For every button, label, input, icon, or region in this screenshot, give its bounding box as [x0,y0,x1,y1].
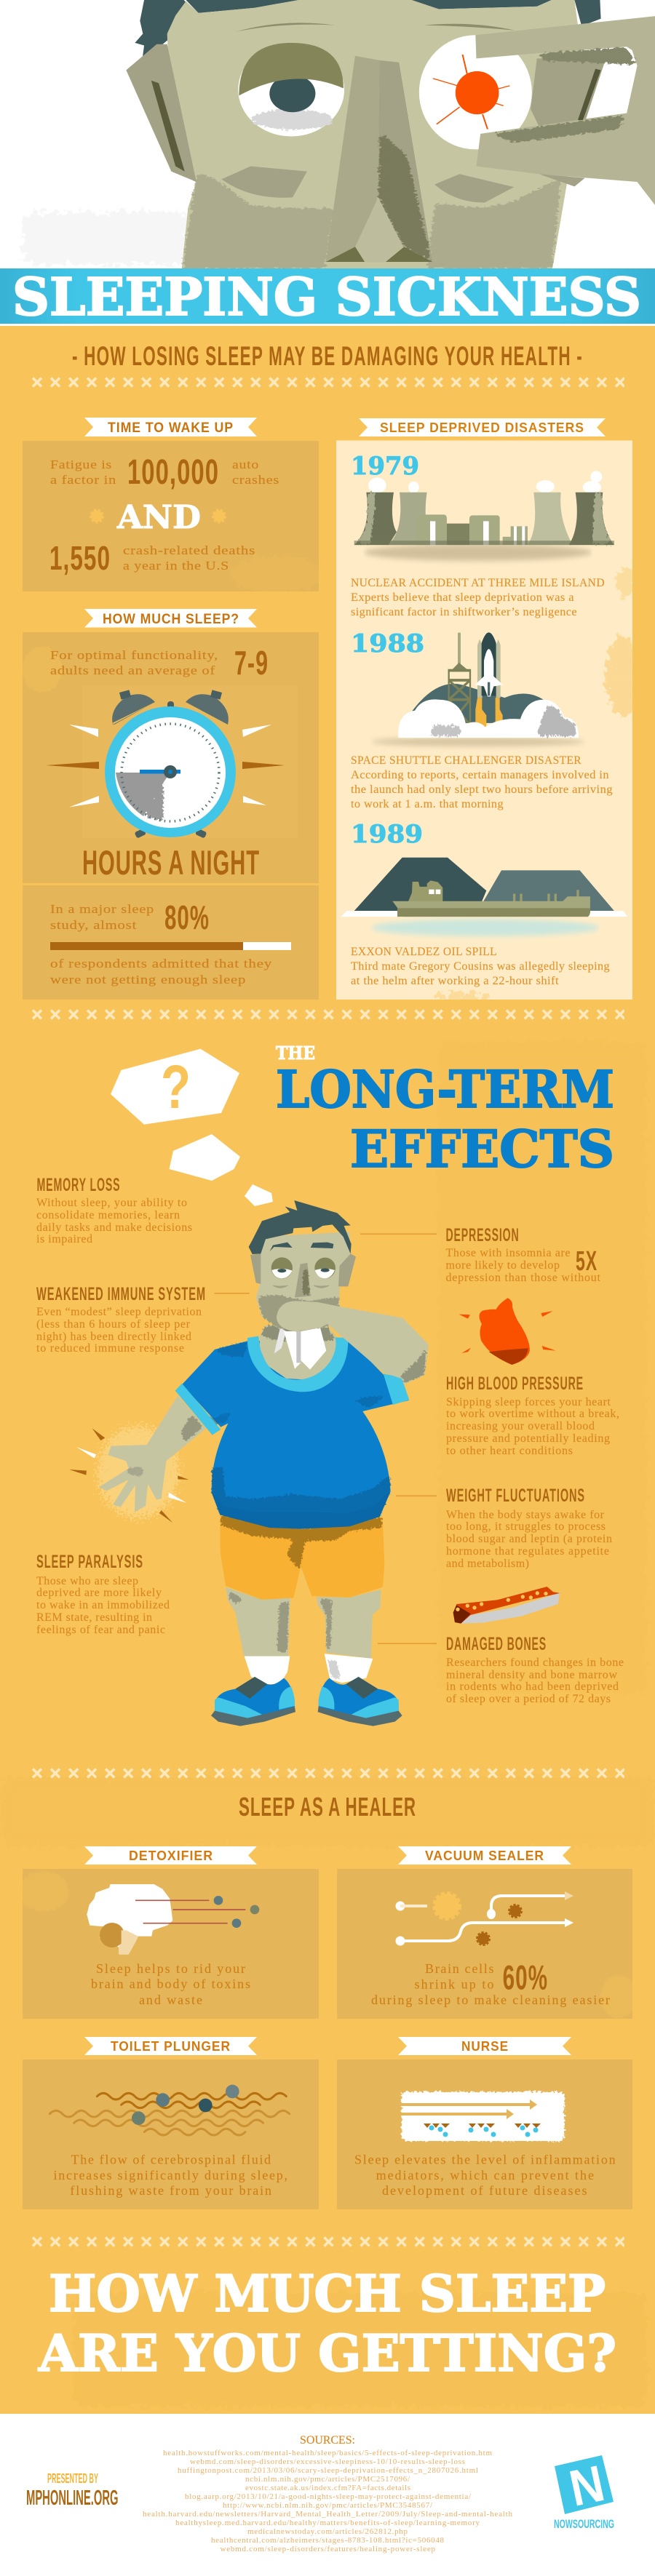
head [249,1200,356,1329]
sources: evostc.state.ak.us/index.cfm?FA=facts.details [245,2484,410,2492]
text: high blood pressure [446,1373,619,1457]
panel: sleep deprived disasters [336,418,640,1005]
hours a night: HOURS A NIGHT [82,843,260,882]
tissues [274,1328,326,1370]
nurse text: mediators, which can prevent the [376,2168,594,2182]
plunger text: The flow of cerebrospinal fluid [71,2152,271,2166]
nurse text: development of future diseases [382,2183,587,2198]
optimal text: adults need an average of [50,663,215,677]
deaths stat: crash-related deaths [123,543,255,557]
text: sleep paralysis: SLEEP PARALYSIS [36,1552,143,1572]
closing question [38,2265,616,2383]
event 1979: 1979 [351,452,419,481]
text: weight fluctuations: When the body stays awake for [446,1509,605,1521]
panel: sleep study 80 percent: of respondents admitted that they [50,957,272,970]
left eye with heavy lid [238,43,344,136]
panel: sleep study 80 percent [23,885,319,1000]
event 1988 [351,629,613,810]
panel: how much sleep [22,609,319,883]
ribbon heading [398,1846,571,1865]
sources: http://www.ncbi.nlm.nih.gov/pmc/articles/PMC3548567/ [223,2501,433,2510]
sources: webmd.com/sleep-disorders/features/healing-power-sleep [220,2545,435,2553]
plunger text [54,2152,287,2198]
collar [247,1336,348,1392]
closing question: ARE YOU GETTING? [38,2324,616,2383]
sources: webmd.com/sleep-disorders/excessive-sleepiness-10/10-results-sleep-loss [190,2457,465,2466]
event 1988: According to reports, certain managers involved in [351,769,609,781]
text: sleep paralysis: REM state, resulting in [36,1611,152,1624]
deaths stat: a year in the U.S [123,559,229,573]
divider crosses [31,377,624,388]
deaths stat: 1,550 [49,539,111,577]
nuclear plant illustration [354,471,614,561]
divider crosses [31,1009,624,1020]
text: high blood pressure: pressure and potentially leading [446,1432,610,1445]
vacuum text [371,1958,610,2007]
thought bubbles with question mark [111,1049,273,1206]
optimal text: For optimal functionality, [50,648,218,662]
text: high blood pressure: to work overtime without a break, [446,1408,619,1420]
text: depression: depression than those without [445,1272,601,1284]
icon: brain with toxins [87,1884,259,1955]
text: weakened immune system: night) has been directly linked [36,1331,191,1343]
long-term effects section heading [276,1042,614,1179]
ribbon heading: SLEEP DEPRIVED DISASTERS [380,420,584,435]
presented by: MPHONLINE.ORG [26,2487,118,2510]
shirt hem [211,1491,391,1529]
logo: nowsourcing: N [565,2455,609,2517]
vacuum text: shrink up to [415,1977,493,1992]
event 1989: 1989 [351,820,423,849]
panel: sleep study 80 percent: 80% [164,898,210,936]
ribbon heading [84,2037,257,2055]
nurse text [354,2152,616,2198]
fingers [475,16,655,205]
ribbon heading [84,418,257,436]
left arm and tingling hand [69,1395,206,1536]
sleeve cuffs [175,1373,409,1435]
event 1988: SPACE SHUTTLE CHALLENGER DISASTER [351,754,581,767]
long-term effects section heading: LONG-TERM [276,1059,614,1120]
text: weakened immune system [36,1284,250,1355]
character: sleep deprived man [69,1200,429,1726]
text: depression [360,1225,601,1284]
event 1979: NUCLEAR ACCIDENT AT THREE MILE ISLAND [351,577,605,589]
nurse text: Sleep elevates the level of inflammation [354,2152,616,2166]
sources: huffingtonpost.com/2013/03/06/scary-sleep-deprivation-effects_n_2807026.html [178,2466,478,2475]
ribbon heading: HOW MUCH SLEEP? [103,611,239,627]
panel: time to wake up [23,418,328,594]
sources: blog.aarp.org/2013/10/21/a-good-nights-sleep-may-protect-against-dementia/ [185,2492,472,2501]
presented by: PRESENTED BY [47,2471,98,2486]
plunger text: flushing waste from your brain [70,2183,271,2198]
divider crosses [31,1768,624,1779]
text: weight fluctuations: hormone that regulates appetite [446,1545,609,1558]
text: memory loss: MEMORY LOSS [36,1175,121,1195]
hair [135,0,601,61]
event 1989 [341,820,627,987]
vacuum text: 60% [503,1958,548,1997]
sources: healthysleep.med.harvard.edu/healthy/matters/benefits-of-sleep/learning-memory [175,2519,480,2527]
ribbon heading [359,418,606,436]
detoxifier text: brain and body of toxins [91,1977,250,1991]
icon: heart [458,1298,556,1365]
logo: nowsourcing: NOWSOURCING [554,2517,614,2531]
event 1988: the launch had only slept two hours before arriving [351,783,613,796]
progress bar [50,942,291,950]
text: weakened immune system: WEAKENED IMMUNE SYSTEM [36,1284,206,1304]
closing question: HOW MUCH SLEEP [49,2265,606,2324]
panel: sleep study 80 percent: were not getting enough sleep [50,973,246,986]
icon: damaged bone [453,1587,560,1624]
event 1988: 1988 [351,629,424,658]
event 1989: Third mate Gregory Cousins was allegedly sleeping [351,960,610,973]
shorts [220,1515,384,1600]
fatigue stat: 100,000 [127,453,219,492]
text: damaged bones: Researchers found changes in bone [446,1656,624,1669]
text: memory loss [36,1175,192,1245]
panel: sleep study 80 percent: study, almost [50,918,137,932]
panel: vacuum sealer [337,1846,637,2019]
detoxifier text: and waste [139,1993,202,2007]
fatigue stat [50,453,279,492]
text: sleep paralysis [36,1552,170,1636]
right arm and fist pressed to nose [277,1301,429,1384]
text: weight fluctuations [396,1486,612,1570]
text: depression: Those with insomnia are [445,1247,571,1259]
text: high blood pressure: Skipping sleep forces your heart [446,1396,611,1408]
oil tanker illustration [341,858,627,936]
detoxifier text [91,1961,250,2007]
fatigue stat: crashes [232,473,279,487]
right eye forced open, bloodshot [419,35,532,149]
text: sleep paralysis: feelings of fear and panic [36,1624,165,1636]
sources: health.howstuffworks.com/mental-health/sleep/basics/5-effects-of-sleep-deprivation.htm [163,2449,492,2457]
panel: detoxifier [18,1846,319,2019]
text: weight fluctuations: too long, it struggles to process [446,1520,606,1533]
socks [245,1654,373,1684]
event 1989: at the helm after working a 22-hour shift [351,975,559,987]
icon: cerebrospinal fluid waves [49,2085,290,2135]
panel: toilet plunger [23,2037,319,2209]
text: high blood pressure: to other heart conditions [446,1445,573,1457]
text: weakened immune system: Even “modest” sleep deprivation [36,1306,202,1318]
ribbon heading: TIME TO WAKE UP [108,420,234,436]
optimal text [50,644,269,682]
icon: shrinking brain cells with arrows [396,1891,573,1945]
sources: health.harvard.edu/newsletters/Harvard_Mental_Health_Letter/2009/July/Sleep-and-mental-health [143,2510,513,2519]
shorts, legs and shoes [211,1491,402,1726]
ribbon heading [84,1846,257,1865]
hero illustration: tired man propping his eye open [126,0,655,269]
nose [326,56,432,263]
detoxifier text: Sleep helps to rid your [96,1961,245,1976]
rays [46,725,285,808]
text: damaged bones: in rodents who had been deprived [446,1680,619,1693]
text: sleep paralysis: Those who are sleep [36,1575,138,1587]
fatigue stat: Fatigue is [50,458,112,471]
text: depression: more likely to develop [445,1259,560,1272]
icon: healing flow [357,2091,565,2141]
presented by [26,2471,118,2510]
sources [143,2434,513,2553]
text: damaged bones: of sleep over a period of 72 days [446,1693,611,1705]
event 1989: EXXON VALDEZ OIL SPILL [351,946,497,958]
and [91,499,225,536]
text: depression: 5X [576,1246,598,1277]
heading: sleep as a healer: SLEEP AS A HEALER [239,1792,416,1822]
text: weight fluctuations: blood sugar and leptin (a protein [446,1533,612,1545]
deaths stat [49,539,255,577]
fatigue stat: auto [232,458,259,471]
text: sleep paralysis: deprived are more likely [36,1587,162,1599]
text: memory loss: Without sleep, your ability to [36,1197,187,1209]
text: sleep paralysis: to wake in an immobilized [36,1599,170,1611]
left shoe [211,1677,295,1726]
torso and shirt [175,1200,429,1529]
vacuum text: Brain cells [425,1961,493,1976]
space shuttle illustration [371,632,584,746]
and: AND [116,499,201,536]
ribbon heading: DETOXIFIER [129,1849,213,1863]
long-term effects section heading: THE [276,1042,315,1064]
neck [260,1325,340,1380]
text: damaged bones: DAMAGED BONES [446,1634,547,1654]
text: damaged bones: mineral density and bone marrow [446,1669,617,1681]
fatigue stat: a factor in [50,473,116,487]
title: SLEEPING SICKNESS [12,266,641,327]
panel: nurse [337,2037,632,2209]
sources: ncbi.nlm.nih.gov/pmc/articles/PMC2517096/ [245,2475,410,2484]
legs [226,1587,381,1659]
text: memory loss: consolidate memories, learn [36,1209,180,1221]
sources: healthcentral.com/alzheimers/stages-8783-108.html?ic=506048 [211,2536,444,2545]
sources: SOURCES: [300,2434,355,2447]
right shoe [318,1677,402,1726]
text: weight fluctuations: and metabolism) [446,1558,529,1570]
divider crosses [31,2236,624,2247]
thought bubbles with question mark: ? [161,1053,191,1121]
title band [0,266,655,327]
logo: nowsourcing [554,2455,614,2531]
ear [126,44,196,182]
panel: sleep study 80 percent: In a major sleep [50,902,154,916]
text: weakened immune system: to reduced immune response [36,1342,184,1355]
text: weakened immune system: (less than 6 hours of sleep per [36,1318,191,1331]
text: memory loss: daily tasks and make decisions [36,1221,192,1234]
ribbon heading: NURSE [461,2039,509,2054]
long-term effects section heading: EFFECTS [350,1119,614,1179]
vacuum text: during sleep to make cleaning easier [371,1993,610,2007]
sources: medicalnewstoday.com/articles/262812.php [247,2527,408,2536]
event 1988: to work at 1 a.m. that morning [351,798,504,810]
event 1979: significant factor in shiftworker’s negligence [351,606,577,618]
alarm clock icon [46,690,285,839]
ribbon heading: VACUUM SEALER [425,1849,544,1863]
text: damaged bones [378,1634,624,1705]
event 1979: Experts believe that sleep deprivation was a [351,591,574,604]
plunger text: increases significantly during sleep, [54,2168,287,2182]
head [167,0,606,269]
text: depression: DEPRESSION [445,1225,520,1245]
event 1979 [351,452,614,618]
text: high blood pressure: increasing your overall blood [446,1420,595,1432]
optimal text: 7-9 [234,644,269,682]
text: memory loss: is impaired [36,1233,92,1245]
ribbon heading: TOILET PLUNGER [111,2039,231,2054]
ribbon heading [398,2037,571,2055]
